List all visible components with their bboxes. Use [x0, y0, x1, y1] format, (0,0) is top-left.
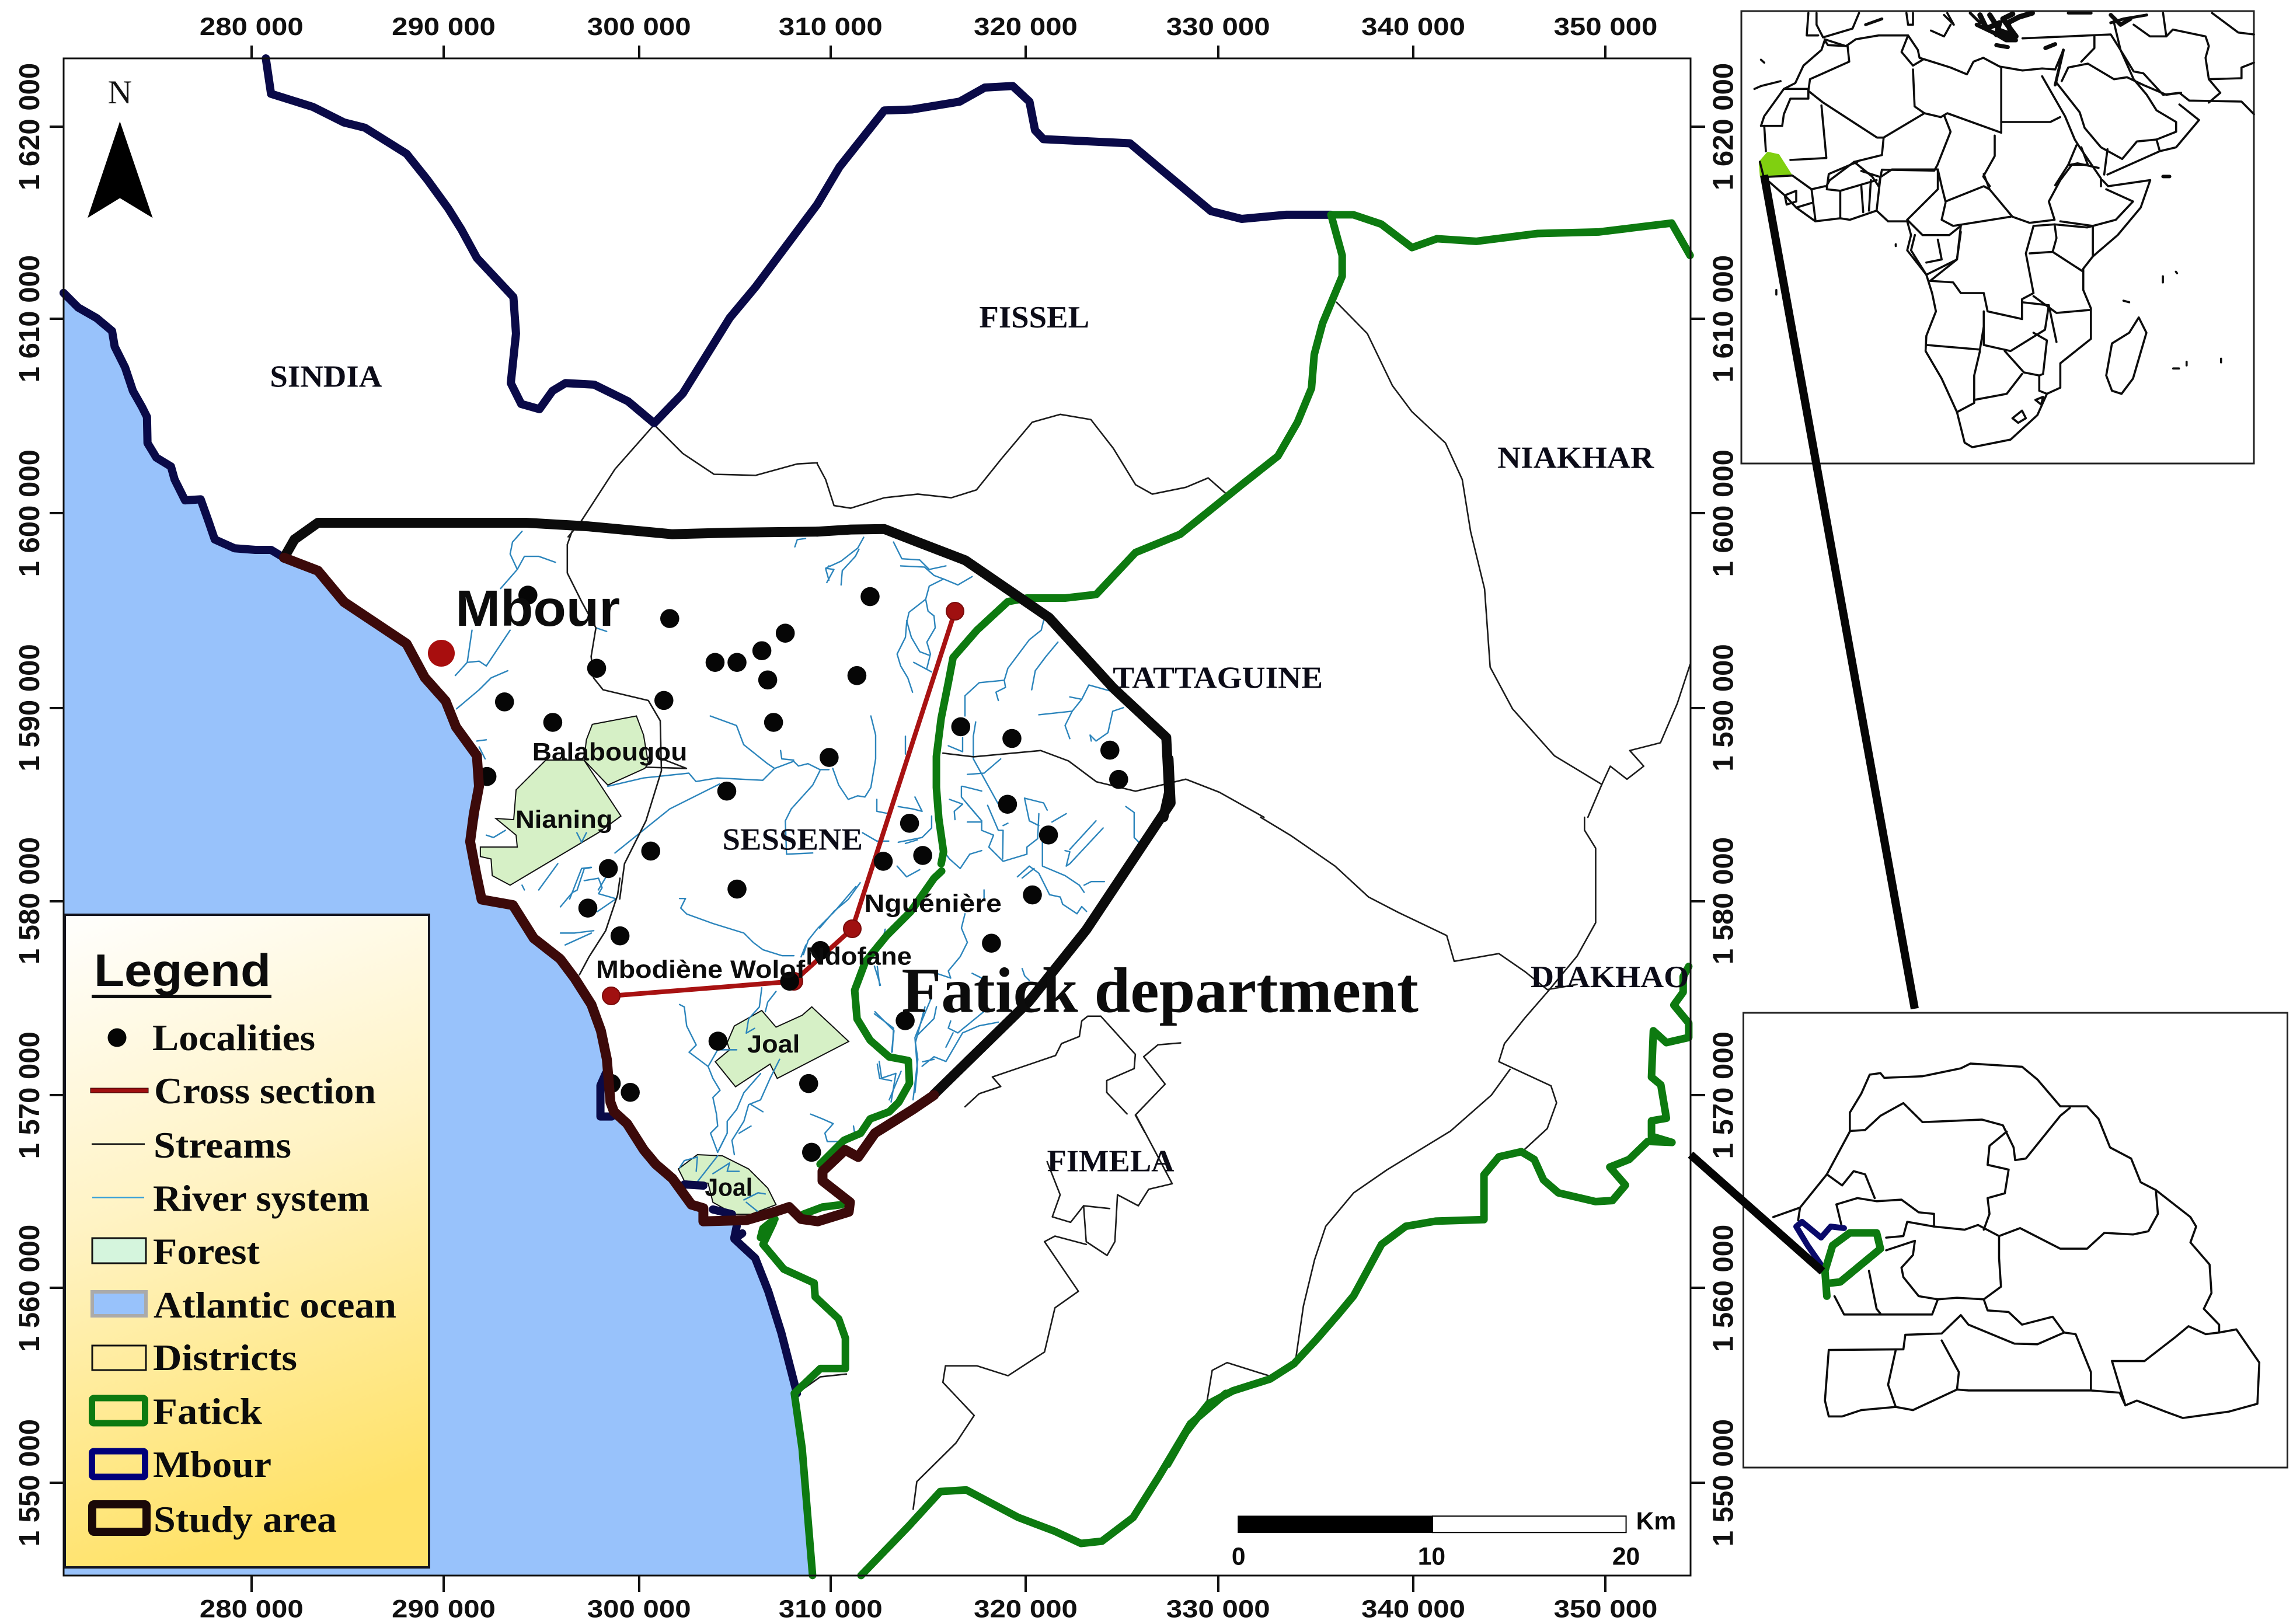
forest: Joal south [678, 1155, 776, 1214]
cross section markers [602, 602, 964, 1005]
cross section line [602, 602, 964, 1005]
scale bar labels [1232, 1507, 1676, 1570]
legend title: Legend [94, 945, 271, 996]
place names: Joal [747, 1030, 800, 1058]
Fatick outline on Senegal inset [1825, 1233, 1880, 1296]
right axis labels: 1 600 000 [1707, 449, 1739, 577]
north label: N [108, 74, 132, 111]
bottom axis labels: 340 000 [1361, 1595, 1465, 1623]
bottom axis labels: 280 000 [200, 1595, 304, 1623]
right axis labels: 1 620 000 [1707, 63, 1739, 190]
left axis labels: 1 560 000 [14, 1225, 46, 1352]
district names: SINDIA [270, 360, 382, 393]
right axis labels: 1 560 000 [1707, 1225, 1739, 1352]
place names: Balabougou [532, 738, 687, 766]
Atlantic ocean [64, 293, 813, 1576]
scale bar labels: 20 [1612, 1542, 1640, 1570]
scale bar labels: 0 [1232, 1542, 1246, 1570]
legend: districts: Districts [153, 1337, 297, 1378]
district names: NIAKHAR [1497, 441, 1654, 475]
top axis labels: 300 000 [587, 13, 691, 41]
bottom axis labels: 300 000 [587, 1595, 691, 1623]
legend: Atlantic ocean: Atlantic ocean [154, 1285, 396, 1326]
bottom axis labels: 310 000 [779, 1595, 883, 1623]
north arrow [88, 121, 153, 218]
place names: Ndofane [806, 942, 912, 970]
legend: cross section: Cross section [154, 1071, 376, 1111]
legend: study area: Study area [154, 1499, 337, 1540]
legend: forest [92, 1231, 260, 1272]
bottom axis labels: 350 000 [1554, 1595, 1657, 1623]
forest: Nianing [480, 760, 621, 885]
localities [478, 586, 1128, 1162]
right axis labels: 1 570 000 [1707, 1031, 1739, 1159]
legend: Mbour [92, 1444, 271, 1485]
legend: Fatick [92, 1391, 262, 1432]
left axis labels: 1 550 000 [14, 1419, 46, 1546]
district names: SESSENE [722, 823, 863, 856]
top axis labels: 330 000 [1166, 13, 1270, 41]
top axis labels: 350 000 [1554, 13, 1657, 41]
legend: Mbour: Mbour [153, 1444, 271, 1485]
district names [270, 301, 1689, 1179]
left axis labels: 1 620 000 [14, 63, 46, 190]
right axis labels: 1 550 000 [1707, 1419, 1739, 1546]
inset: Senegal [1743, 1013, 2287, 1468]
top axis labels [200, 13, 1657, 41]
forest: Joal north [715, 1007, 849, 1087]
legend: districts [92, 1337, 297, 1378]
river system [455, 531, 1139, 1212]
scale bar labels: 10 [1418, 1542, 1445, 1570]
connector arrow to Senegal inset [1691, 1155, 1822, 1271]
left axis labels: 1 600 000 [14, 449, 46, 577]
district names: FISSEL [979, 301, 1089, 334]
place names: Nianing [515, 806, 613, 834]
left axis labels [14, 63, 46, 1546]
top axis labels: 310 000 [779, 13, 883, 41]
left axis labels: 1 610 000 [14, 255, 46, 382]
map frame [64, 58, 1691, 1576]
top axis labels: 340 000 [1361, 13, 1465, 41]
Mbour boundary [64, 58, 1331, 1393]
legend: forest: Forest [153, 1231, 260, 1272]
district names: DIAKHAO [1531, 960, 1689, 994]
legend panel [65, 915, 429, 1567]
Fatick department label: Fatick department [901, 954, 1419, 1026]
bottom axis labels [200, 1595, 1657, 1623]
left axis labels: 1 580 000 [14, 837, 46, 964]
legend: localities: Localities [152, 1017, 315, 1058]
scale bar labels: Km [1636, 1507, 1676, 1535]
bottom axis labels: 330 000 [1166, 1595, 1270, 1623]
scale bar [1232, 1507, 1676, 1570]
Senegal regional borders [1773, 1064, 2259, 1418]
forest patches [480, 716, 849, 1214]
top axis labels: 280 000 [200, 13, 304, 41]
bottom axis labels: 320 000 [974, 1595, 1078, 1623]
district names: TATTAGUINE [1113, 661, 1323, 695]
legend: study area [92, 1499, 337, 1540]
right axis labels [1707, 63, 1739, 1546]
right axis labels: 1 590 000 [1707, 644, 1739, 772]
district boundaries [567, 302, 1690, 1509]
legend: river system: River system [153, 1178, 370, 1219]
axis ticks [50, 46, 1705, 1592]
forest: Balabougou [584, 716, 649, 785]
right axis labels: 1 610 000 [1707, 255, 1739, 382]
place names: Joal [705, 1173, 752, 1201]
legend: streams: Streams [154, 1125, 291, 1166]
Mbour outline on Senegal inset [1796, 1222, 1844, 1268]
place names [515, 738, 1002, 1201]
inset: Africa [1741, 11, 2254, 463]
legend: Fatick: Fatick [153, 1391, 262, 1432]
Fatick department boundary [761, 215, 1690, 1576]
top axis labels: 290 000 [392, 13, 496, 41]
Mbour town marker [428, 640, 455, 667]
left axis labels: 1 590 000 [14, 644, 46, 772]
right axis labels: 1 580 000 [1707, 837, 1739, 964]
sub-Saharan Africa borders [1760, 162, 2221, 447]
Mbour town label: Mbour [455, 580, 620, 637]
map labels and axis text [14, 13, 1739, 1623]
study area boundary [284, 523, 1170, 1221]
place names: Mbodiène Wolof [596, 956, 806, 984]
Senegal highlight on Africa inset [1759, 152, 1793, 176]
connector arrow to Africa inset [1764, 175, 1915, 1009]
left axis labels: 1 570 000 [14, 1031, 46, 1159]
top axis labels: 320 000 [974, 13, 1078, 41]
district names: FIMELA [1047, 1145, 1175, 1179]
bottom axis labels: 290 000 [392, 1595, 496, 1623]
place names: Nguénière [864, 890, 1002, 918]
northern Africa and Middle East borders [1754, 13, 2254, 186]
